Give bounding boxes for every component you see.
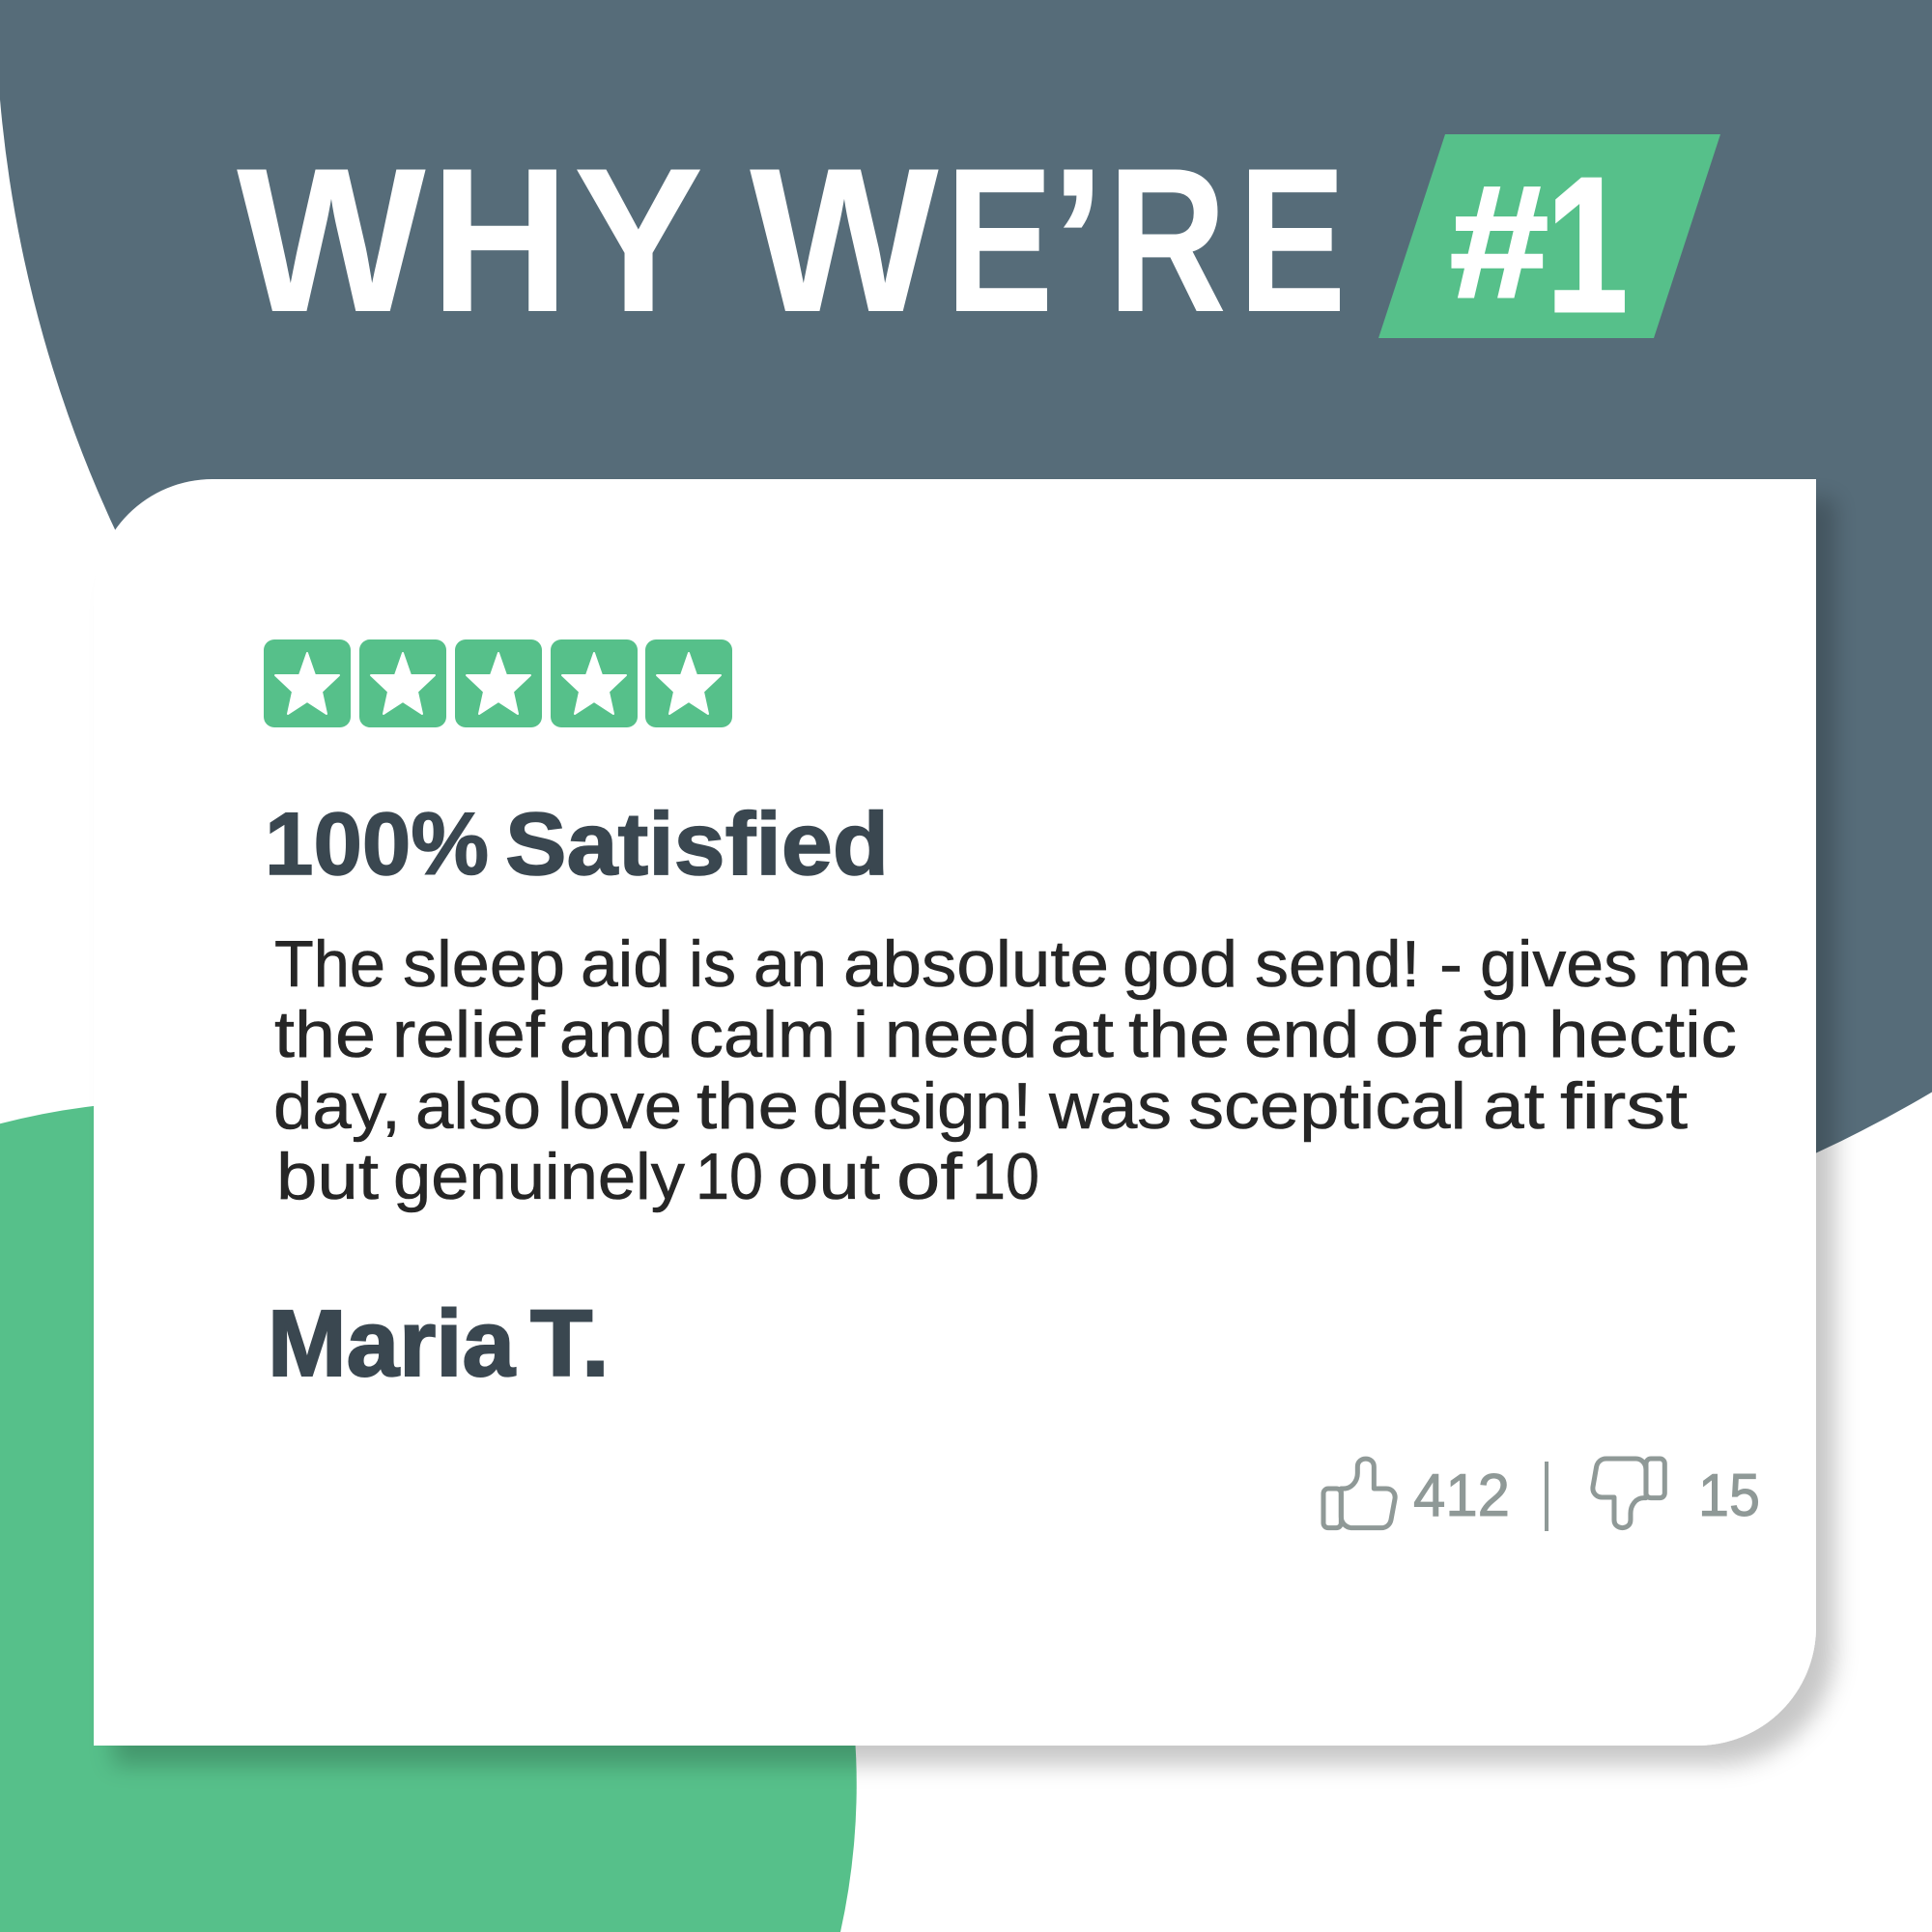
review body text: first: [1560, 1069, 1688, 1143]
review body text: an: [1456, 998, 1529, 1071]
review body text: at: [1483, 1069, 1545, 1143]
review body text: sceptical: [1188, 1069, 1466, 1143]
dislikes count: 15: [1698, 1463, 1760, 1529]
review body text: relief: [392, 998, 545, 1071]
title: [237, 126, 1347, 355]
title: ’: [1050, 126, 1106, 355]
badge: #1: #: [1450, 153, 1548, 330]
review body text: me: [1657, 927, 1750, 1001]
review body text: need: [885, 998, 1037, 1071]
review body text: i: [853, 998, 868, 1071]
reviewer name: Maria: [268, 1291, 516, 1396]
review body text: of: [896, 1140, 962, 1213]
title: W: [237, 126, 426, 355]
review body text: and: [559, 998, 673, 1071]
review body text: hectic: [1548, 998, 1737, 1071]
panel: review card: [94, 479, 1816, 1746]
review body text: god: [1122, 927, 1237, 1001]
background shape: dark slate circle: [0, 0, 1932, 1271]
review heading: Satisfied: [505, 795, 889, 894]
review body text: is: [689, 927, 736, 1001]
review body text: at: [1050, 998, 1114, 1071]
title: W: [750, 126, 939, 355]
review body text: aid: [581, 927, 670, 1001]
review body text: The: [274, 927, 385, 1001]
review body text: the: [696, 1069, 799, 1143]
review body text: design!: [812, 1069, 1032, 1143]
review body text: the: [1128, 998, 1230, 1071]
review body text: out: [778, 1140, 880, 1213]
review body text: an: [753, 927, 827, 1001]
likes count: 412: [1413, 1463, 1510, 1529]
review body text: but: [276, 1140, 379, 1213]
title: R: [1108, 126, 1227, 355]
icon: thumbs up: [1323, 1459, 1395, 1528]
review heading: 100%: [265, 795, 489, 894]
title: E: [1238, 126, 1347, 355]
reviewer name: T.: [530, 1291, 610, 1396]
title: Y: [574, 126, 703, 355]
review body text: end: [1244, 998, 1359, 1071]
review body text: calm: [689, 998, 836, 1071]
review body text: absolute: [843, 927, 1109, 1001]
review body text: send!: [1255, 927, 1420, 1001]
review body text: was: [1048, 1069, 1172, 1143]
review body text: also: [415, 1069, 541, 1143]
review body text: the: [274, 998, 376, 1071]
icon: thumbs down: [1593, 1459, 1664, 1528]
review heading: [265, 795, 889, 894]
review body text: gives: [1480, 927, 1637, 1001]
review body text: genuinely: [393, 1140, 685, 1213]
review body text: 10: [972, 1140, 1039, 1213]
background shape: green circle: [0, 1101, 857, 1932]
badge: #1: [1378, 134, 1720, 353]
divider: [1545, 1462, 1548, 1531]
title: H: [431, 126, 569, 355]
review body text: 10: [696, 1140, 763, 1213]
badge: #1: 1: [1547, 138, 1628, 353]
review body text: [273, 927, 1750, 1213]
review body text: love: [557, 1069, 682, 1143]
review body text: day,: [273, 1069, 401, 1143]
title: E: [946, 126, 1053, 355]
review body text: of: [1375, 998, 1441, 1071]
review body text: -: [1439, 927, 1463, 1001]
review body text: sleep: [403, 927, 565, 1001]
icon: five star rating: [264, 639, 732, 727]
